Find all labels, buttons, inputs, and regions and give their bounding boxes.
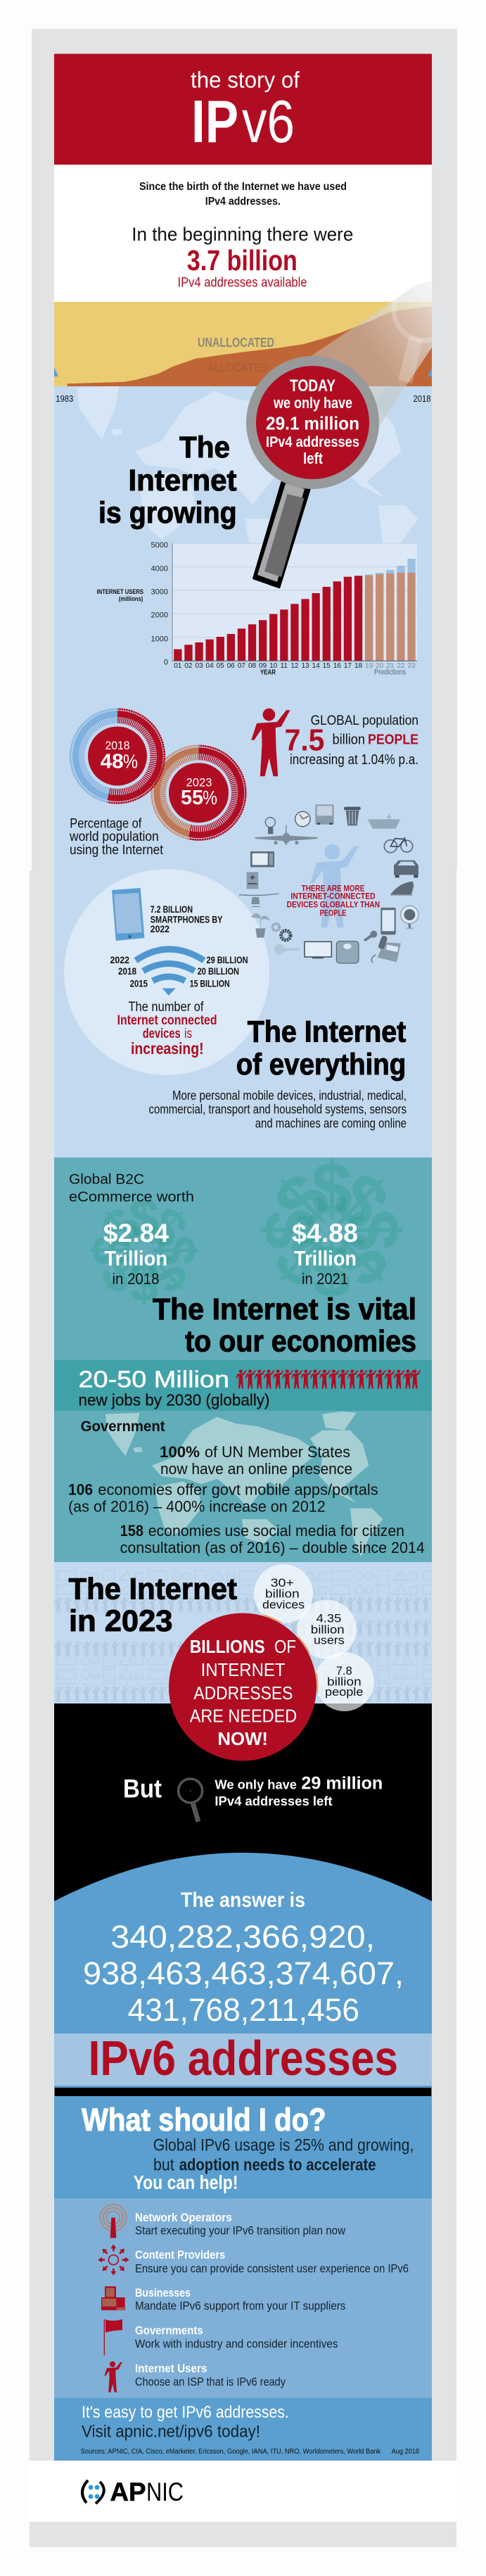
bar chart: internet users: 4000 [151, 565, 168, 573]
text: global population: billion [332, 732, 365, 748]
text: government: of UN Member States [205, 1443, 350, 1461]
bar chart: internet users: (millions) [119, 595, 143, 603]
intro sentence: IPv4 addresses. [205, 196, 281, 208]
panel: actions list [54, 2198, 432, 2398]
bar chart: internet users [97, 541, 417, 677]
intro sentence [139, 181, 347, 208]
heading: The Internet is vital to our economies [153, 1293, 416, 1359]
heading: The Internet in 2023 [69, 1573, 237, 1638]
item: network operators: Start executing your IPv6 transition plan now [135, 2224, 345, 2237]
text: global IPv6 usage [153, 2136, 414, 2175]
logo: APNIC: AP [110, 2477, 146, 2506]
panel: footer call to action [54, 2398, 432, 2461]
panel: black IPv4 shortage background [54, 1703, 432, 1908]
text: But: But [123, 1774, 162, 1803]
text: only 29 million left: IPv4 addresses left [215, 1794, 333, 1808]
icon: bicycle [384, 837, 413, 853]
icon: smartphone [112, 888, 144, 941]
icon: plug [364, 931, 377, 941]
title: IPv6: IP [191, 89, 238, 156]
panel: connected devices circle [64, 869, 269, 1075]
callout: billions of addresses needed: NOW! [217, 1728, 268, 1749]
icon: internet user [104, 2361, 122, 2392]
caption: percentage of world population: Percentage of [70, 817, 142, 832]
title: IPv6 [191, 89, 295, 156]
dollar rosette left [81, 1187, 207, 1314]
panel: what should I do [54, 2088, 432, 2198]
bar chart: internet users: 3000 [151, 588, 168, 597]
icon: old television [250, 851, 274, 867]
caption: percentage of world population [69, 817, 164, 858]
callout: more devices than people: THERE ARE MORE [302, 884, 364, 894]
bar chart: internet users: 14 [312, 662, 320, 670]
bubble text: 4.35 billion users [311, 1612, 345, 1647]
text: global population: increasing at 1.04% p.a. [290, 752, 418, 768]
dollar rosette left: $ [89, 1195, 154, 1260]
bubble text: 4.35 billion users: billion [311, 1623, 345, 1637]
panel: the Internet in 2023 [54, 1562, 432, 1703]
donut: 2023 55 percent: % [203, 787, 217, 808]
bar chart: internet users: 10 [269, 662, 278, 670]
text: government: economies use social media for citizen [148, 1522, 404, 1540]
text: only 29 million left [215, 1773, 383, 1808]
wifi year and count labels: 2018 [118, 965, 136, 977]
wifi year and count labels: 2022 [110, 954, 129, 965]
dollar rosette left: $ [129, 1187, 160, 1249]
sources: Sources; APNIC, CIA, Cisco, eMarketer, Ericsson, Google, IANA, ITU, NRO, Worldometers, World Bank [81, 2448, 381, 2456]
callout: more devices than people: INTERNET-CONNECTED [290, 892, 376, 901]
icon: network tower [100, 2204, 127, 2238]
dollar rosette right: $ [250, 1210, 332, 1250]
heading: The Internet is vital to our economies: to our economies [185, 1325, 416, 1359]
bubble text: 30+ billion devices: billion [265, 1587, 300, 1601]
heading: The Internet of everything: The Internet [248, 1015, 406, 1049]
callout: more devices than people: PEOPLE [320, 908, 346, 918]
bubble text: 7.8 billion people: people [325, 1685, 363, 1699]
icon: gears [272, 924, 290, 940]
text: number of connected devices increasing: is [184, 1027, 192, 1041]
text: government: 106 [68, 1480, 93, 1499]
bar chart: internet users: 07 [238, 662, 245, 670]
text: visit apnic.net: Visit apnic.net/ipv6 today! [82, 2423, 260, 2442]
icon: key [274, 944, 299, 955]
text: the answer is: The answer is [181, 1889, 305, 1912]
bar chart: internet users: 17 [344, 662, 352, 670]
heading: The Internet of everything: of everything [236, 1048, 406, 1081]
text: you can help: You can help! [134, 2171, 238, 2193]
heading: The Internet in 2023: in 2023 [69, 1604, 173, 1638]
text: only 29 million left: 29 million [301, 1773, 383, 1793]
item: governments: Work with industry and consider incentives [135, 2337, 338, 2350]
bubble text: 4.35 billion users: users [314, 1634, 345, 1647]
icon: content arrows [98, 2244, 129, 2276]
number: IPv6 address count [83, 1919, 404, 2028]
figure: 2.84 trillion in 2018 [103, 1219, 169, 1288]
dollar rosette right: $ [311, 1230, 352, 1312]
icon: magnifying glass with callout [246, 356, 379, 588]
heading: The Internet is growing: The [179, 431, 230, 464]
year labels on area chart [56, 393, 431, 404]
bar chart: internet users: 15 [323, 662, 331, 670]
dollar rosette right [250, 1148, 414, 1312]
text: number of connected devices increasing: devices [143, 1027, 181, 1041]
bar chart: internet users: INTERNET USERS [97, 588, 143, 596]
callout: today we only have [266, 376, 359, 467]
figure: 4.88 trillion in 2021: in 2021 [302, 1270, 348, 1288]
text: global IPv6 usage: adoption needs to accelerate [179, 2156, 376, 2175]
panel: title banner [54, 53, 432, 165]
text: global B2C ecommerce: Global B2C [69, 1172, 144, 1188]
item: network operators: Network Operators [135, 2211, 232, 2224]
year labels on area chart: 1983 [56, 393, 73, 404]
wifi year and count labels: 15 BILLION [190, 977, 230, 989]
icon ring: internet-connected devices around a person [239, 804, 418, 963]
callout: billions of addresses needed: BILLIONS [190, 1636, 265, 1657]
icon: light bulb [265, 818, 275, 834]
bar chart: internet users: 2000 [151, 611, 168, 619]
icon: iron [390, 882, 414, 896]
text: global B2C ecommerce: eCommerce worth [69, 1189, 194, 1205]
bar chart: internet users: 03 [195, 662, 203, 670]
text: government: consultation (as of 2016) – double since 2014 [120, 1539, 425, 1556]
heading: What should I do: What should I do? [82, 2102, 326, 2138]
figure: 4.88 trillion in 2021 [292, 1219, 358, 1288]
figure: 4.88 trillion in 2021: $4.88 [292, 1219, 358, 1248]
item: businesses [135, 2286, 345, 2312]
bubble text: 4.35 billion users: 4.35 [316, 1612, 341, 1625]
dollar rosette left: $ [134, 1195, 200, 1260]
callout: today we only have: we only have [273, 394, 352, 412]
bar chart: internet users: 18 [354, 662, 362, 670]
bubble text: 30+ billion devices: 30+ [271, 1576, 294, 1590]
number: IPv6 address count: 938,463,463,374,607, [83, 1955, 404, 1991]
donut: 2023 55 percent [152, 746, 245, 840]
icon: flag [104, 2319, 122, 2355]
dollar rosette left: $ [89, 1241, 154, 1306]
icon: bus [315, 804, 334, 825]
bar chart: internet users: 05 [217, 662, 224, 670]
item: internet users [135, 2362, 286, 2388]
text: only 29 million left: We only have [215, 1777, 297, 1791]
callout: billions of addresses needed: ADDRESSES [193, 1682, 293, 1703]
donut: 2023 55 percent: 2023 [186, 776, 212, 789]
bubbles: devices users people [254, 1564, 374, 1711]
icon: blue person [310, 844, 359, 927]
figure: 2.84 trillion in 2018: in 2018 [113, 1270, 159, 1288]
callout: today we only have: IPv4 addresses [266, 434, 359, 450]
bar chart: internet users: Predictions [374, 668, 406, 677]
logo: APNIC [82, 2477, 184, 2506]
world map background [105, 1411, 383, 1557]
bar chart: internet users: 21 [386, 662, 395, 670]
item: content providers: Ensure you can provide consistent user experience on IPv6 [135, 2262, 409, 2275]
panel: introduction [54, 165, 432, 302]
bubble text: 7.8 billion people [325, 1664, 363, 1699]
callout: more devices than people: DEVICES GLOBALLY THAN [287, 899, 380, 909]
icons: row of people [236, 1370, 421, 1389]
item: content providers: Content Providers [135, 2248, 225, 2261]
bar chart: internet users: 08 [248, 662, 256, 670]
dollar rosette right: $ [311, 1148, 352, 1230]
bubble text: 7.8 billion people: billion [327, 1675, 362, 1689]
bar chart: internet users: 22 [397, 662, 405, 670]
number: IPv6 address count: 431,768,211,456 [128, 1992, 359, 2028]
callout: today we only have: 29.1 million [266, 413, 359, 434]
bar chart: internet users: 09 [259, 662, 267, 670]
band: new jobs [54, 1360, 432, 1411]
dollar rosette right: $ [332, 1210, 414, 1250]
donut: 2018 48 percent: 48 [101, 751, 124, 773]
text: global IPv6 usage: Global IPv6 usage is 25% and growing, [153, 2136, 414, 2155]
panel: the answer [54, 1853, 432, 2033]
icon: desk telephone [371, 935, 401, 963]
bar chart: internet users: 01 [174, 662, 182, 670]
area chart: allocated and unallocated addresses [54, 302, 432, 386]
wifi year and count labels: 20 BILLION [198, 965, 239, 977]
text: government: 100% [160, 1443, 200, 1461]
bar chart: internet users: 02 [184, 662, 193, 670]
text: internet of everything description: More personal mobile devices, industrial, medical, [172, 1089, 407, 1103]
panel: the Internet is growing and devices background [54, 384, 432, 1157]
text: number of connected devices increasing: Internet connected [117, 1013, 217, 1028]
band: new jobs: 20-50 Million [79, 1366, 229, 1392]
text: number of connected devices increasing [117, 1000, 217, 1058]
dollar rosette left: $ [134, 1241, 200, 1306]
title: IPv6: v6 [242, 89, 295, 156]
text: smartphones by 2022: 2022 [151, 924, 170, 934]
band: new jobs: new jobs by 2030 (globally) [79, 1390, 270, 1409]
icon: red person [251, 709, 290, 776]
donut: 2018 48 percent [70, 709, 165, 803]
donut: 2018 48 percent: % [123, 751, 138, 773]
text: internet of everything description: commercial, transport and household systems, sensors [149, 1102, 407, 1116]
bar chart: internet users: 0 [164, 659, 168, 667]
donut: 2023 55 percent: 55 [181, 787, 203, 809]
text: government: now have an online presence [160, 1460, 352, 1478]
wifi year and count labels: 29 BILLION [207, 954, 248, 965]
icon: fan [401, 906, 418, 929]
dollar rosette left: $ [146, 1235, 207, 1266]
text: government: (as of 2016) – 400% increase on 2012 [68, 1498, 326, 1516]
callout: billions of addresses needed: OF [274, 1636, 296, 1657]
text: government: Government [81, 1419, 165, 1435]
heading: The Internet of everything [236, 1015, 406, 1081]
icon: bathroom scale [336, 941, 359, 963]
text: number of connected devices increasing: The number of [128, 1000, 204, 1015]
text: global B2C ecommerce [69, 1172, 194, 1205]
3.7 billion figure: 3.7 billion [187, 244, 298, 277]
icon: small magnifier [179, 1779, 203, 1822]
magnifier light beam and ghost magnifier [311, 281, 432, 426]
bar chart: internet users: 12 [290, 662, 299, 670]
logo: APNIC: NIC [146, 2477, 184, 2506]
dollar rosette right: $ [259, 1215, 346, 1302]
heading: The Internet is growing: Internet [128, 464, 236, 497]
text: global population: 7.5 [285, 723, 324, 758]
area chart: allocated and unallocated addresses: ALLOCATED [207, 361, 268, 374]
icon: flat television [305, 941, 331, 958]
bubble text: 30+ billion devices: devices [262, 1598, 305, 1611]
title: the story of: the story of [191, 67, 300, 92]
callout: billions of addresses needed: INTERNET [201, 1659, 286, 1680]
text: easy to get IPv6: It's easy to get IPv6 addresses. [82, 2403, 289, 2422]
text: global population: PEOPLE [368, 732, 418, 748]
bubble text: 7.8 billion people: 7.8 [336, 1664, 352, 1677]
wifi year and count labels [110, 954, 248, 989]
bar chart: internet users: 20 [376, 662, 384, 670]
caption: percentage of world population: world population [69, 830, 159, 844]
item: businesses: Mandate IPv6 support from your IT suppliers [135, 2299, 345, 2312]
callout: billions of addresses needed: ARE NEEDED [190, 1705, 297, 1726]
heading: The Internet in 2023: The Internet [69, 1573, 237, 1606]
item: network operators [135, 2211, 345, 2237]
heading: The Internet is growing [98, 431, 237, 530]
banner: IPv6 addresses: IPv6 addresses [89, 2031, 398, 2086]
bar chart: internet users: 16 [333, 662, 341, 670]
dollar rosette right: $ [259, 1157, 346, 1245]
dollar rosette right: $ [317, 1157, 404, 1245]
text: smartphones by 2022: 7.2 BILLION [151, 904, 193, 915]
figure: 2.84 trillion in 2018: $2.84 [103, 1219, 169, 1248]
intro sentence: Since the birth of the Internet we have used [139, 181, 347, 193]
donut: 2018 48 percent: 2018 [105, 739, 129, 752]
callout: more devices than people [287, 884, 380, 918]
text: government [68, 1419, 425, 1556]
icon: ship [368, 814, 400, 829]
item: internet users: Choose an ISP that is IPv6 ready [135, 2375, 286, 2388]
bar chart: internet users: 5000 [151, 541, 168, 550]
item: businesses: Businesses [135, 2286, 191, 2299]
icon: wifi signal [136, 949, 204, 996]
text: smartphones by 2022 [151, 904, 222, 934]
text: smartphones by 2022: SMARTPHONES BY [151, 915, 222, 925]
icon: mobile phone [381, 908, 396, 934]
bar chart: internet users: 06 [227, 662, 235, 670]
bar chart: internet users: 11 [281, 662, 288, 670]
text: number of connected devices increasing: increasing! [131, 1039, 204, 1058]
text: global IPv6 usage: but [153, 2156, 174, 2175]
text: internet of everything description [149, 1089, 407, 1130]
icon: trash can [344, 807, 361, 825]
text: government: 158 [120, 1522, 143, 1540]
IPv4 addresses available: IPv4 addresses available [177, 276, 307, 291]
figure: 2.84 trillion in 2018: Trillion [104, 1247, 167, 1271]
icon: potted plant [251, 913, 270, 938]
dollar rosette left: $ [129, 1252, 160, 1314]
text: internet of everything description: and machines are coming online [255, 1116, 407, 1130]
dollar rosette right: $ [317, 1215, 404, 1302]
year labels on area chart: 2018 [414, 393, 430, 404]
icon: airplane [255, 825, 318, 845]
in the beginning text: In the beginning there were [132, 224, 353, 245]
icon: medical cabinet [247, 872, 258, 889]
callout: today we only have: left [303, 450, 324, 467]
text: government: economies offer govt mobile apps/portals [98, 1480, 378, 1499]
area chart: allocated and unallocated addresses: UNALLOCATED [198, 336, 274, 350]
icon: clock [295, 811, 310, 827]
text: global population: GLOBAL population [311, 713, 418, 728]
callout: today we only have: TODAY [290, 376, 335, 395]
item: content providers [135, 2248, 409, 2275]
icon: helicopter [239, 894, 279, 906]
icon: business buildings [101, 2286, 125, 2310]
bubble text: 30+ billion devices [262, 1576, 305, 1611]
item: governments: Governments [135, 2324, 203, 2337]
bar chart: internet users: 19 [365, 662, 373, 670]
number: IPv6 address count: 340,282,366,920, [110, 1919, 375, 1955]
item: governments [135, 2324, 338, 2350]
callout: billions of addresses needed [169, 1613, 316, 1760]
caption: percentage of world population: using the Internet [70, 843, 164, 858]
panel: economies [54, 1148, 432, 1562]
figure: 4.88 trillion in 2021: Trillion [294, 1247, 357, 1271]
bar chart: internet users: 13 [301, 662, 309, 670]
heading: The Internet is vital to our economies: The Internet is vital [153, 1293, 416, 1326]
heading: The Internet is growing: is growing [98, 496, 237, 530]
bar chart: internet users: YEAR [260, 669, 276, 677]
item: internet users: Internet Users [135, 2362, 207, 2375]
text: global population [285, 713, 418, 768]
dollar rosette left: $ [81, 1235, 143, 1266]
sources: Aug 2018 [392, 2448, 419, 2456]
bar chart: internet users: 04 [206, 662, 214, 670]
icon: car [394, 861, 418, 877]
wifi year and count labels: 2015 [130, 977, 148, 989]
bar chart: internet users: 23 [407, 662, 416, 670]
bar chart: internet users: 1000 [151, 635, 168, 644]
